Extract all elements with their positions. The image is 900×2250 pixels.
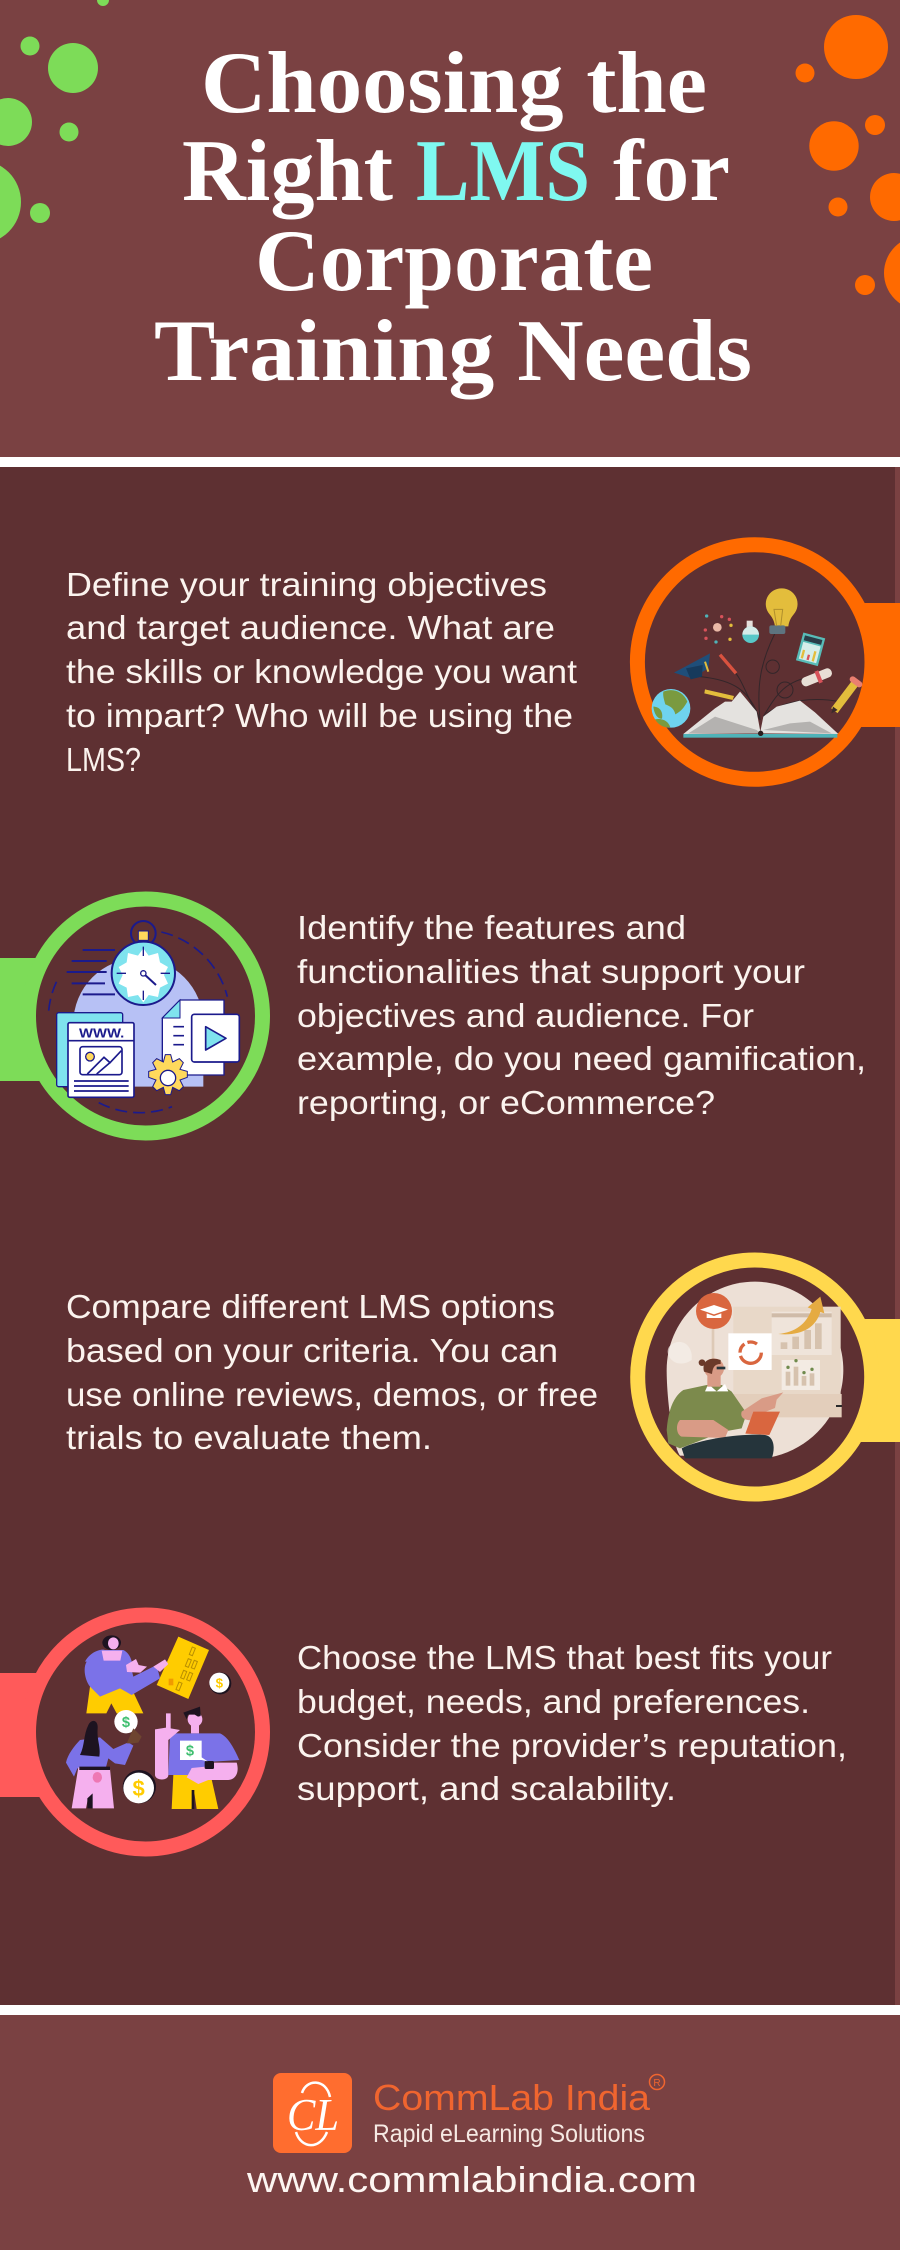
step 4 text: budget, needs, and preferences. — [297, 1683, 810, 1720]
green decorative dots — [0, 0, 109, 244]
title: for — [613, 123, 730, 220]
step 1 text — [66, 566, 577, 778]
panel: footer — [0, 2015, 900, 2250]
panel: steps — [0, 467, 900, 2005]
logo mark — [273, 2073, 352, 2153]
title: Corporate — [255, 213, 653, 310]
step 1 text: the skills or knowledge you want — [66, 653, 577, 690]
step 1 text: LMS? — [66, 741, 141, 778]
icon: people exchanging money: $ — [216, 1675, 224, 1690]
step 3 badge — [638, 1260, 900, 1494]
step 3 text — [66, 1288, 598, 1456]
title: Choosing the — [201, 35, 707, 132]
title: LMS — [416, 123, 590, 220]
website url: www.commlabindia.com — [246, 2159, 697, 2200]
step 2 text: objectives and audience. For — [297, 997, 754, 1034]
step 1 text: to impart? Who will be using the — [66, 697, 573, 734]
step 2 text: functionalities that support your — [297, 953, 805, 990]
icon: people exchanging money: $ — [186, 1744, 194, 1760]
icon: people exchanging money: $ — [133, 1776, 145, 1801]
step 4 badge — [0, 1615, 262, 1849]
step 3 text: trials to evaluate them. — [66, 1419, 432, 1456]
step 4 text: support, and scalability. — [297, 1770, 676, 1807]
logo mark: CL — [287, 2089, 339, 2140]
step 3 text: use online reviews, demos, or free — [66, 1376, 598, 1413]
orange decorative dots — [796, 15, 900, 310]
step 2 text: Identify the features and — [297, 909, 686, 946]
step 4 text: Choose the LMS that best fits your — [297, 1639, 832, 1676]
step 3 text: Compare different LMS options — [66, 1288, 555, 1325]
step 4 text — [297, 1639, 847, 1807]
icon: open book with ideas — [652, 588, 859, 738]
brand name: CommLab India — [373, 2077, 651, 2118]
step 1 text: and target audience. What are — [66, 609, 555, 646]
step 2 text: reporting, or eCommerce? — [297, 1084, 715, 1121]
icon: stopwatch, web page, video, gear: WWW. — [79, 1025, 124, 1040]
icon: man presenting analytics — [667, 1282, 843, 1458]
step 2 text: example, do you need gamification, — [297, 1040, 866, 1077]
step 1 text: Define your training objectives — [66, 566, 547, 603]
step 3 text: based on your criteria. You can — [66, 1332, 558, 1369]
step 1 badge — [637, 545, 900, 779]
icon: people exchanging money: $ — [122, 1715, 130, 1731]
title — [154, 35, 752, 400]
title: Training Needs — [154, 303, 752, 400]
panel: header — [0, 0, 900, 457]
tagline: Rapid eLearning Solutions — [373, 2120, 645, 2148]
title: Right — [182, 123, 393, 220]
icon: people exchanging money — [66, 1635, 239, 1809]
step 2 badge — [0, 899, 262, 1133]
brand name: R — [653, 2078, 661, 2089]
step 4 text: Consider the provider’s reputation, — [297, 1727, 847, 1764]
icon: stopwatch, web page, video, gear — [49, 921, 239, 1113]
step 2 text — [297, 909, 866, 1121]
